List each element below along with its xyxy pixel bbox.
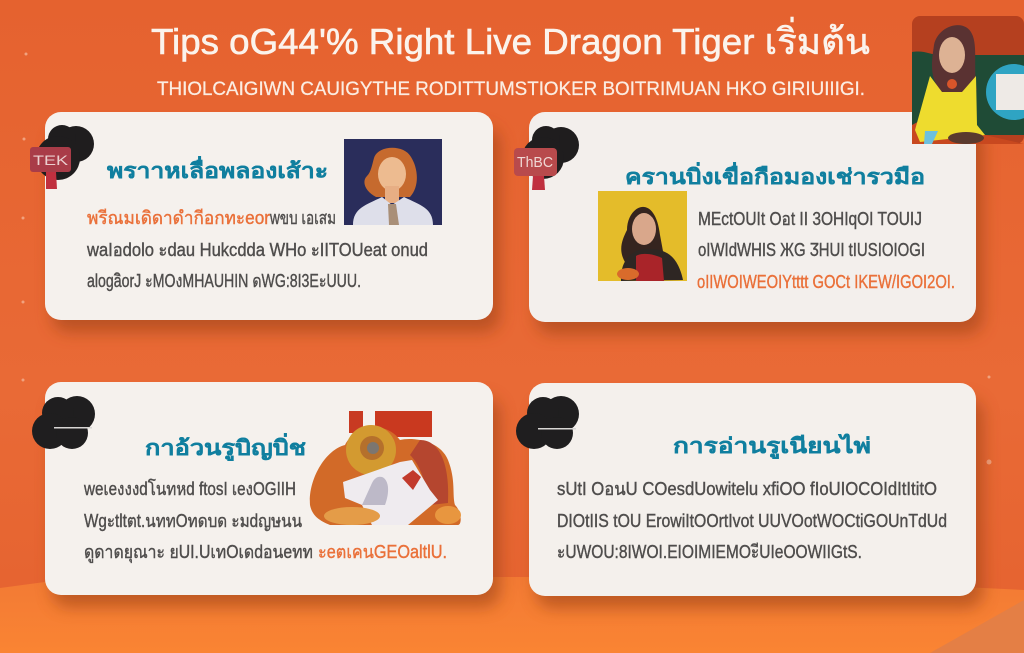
icon: black blob with red tag [514, 126, 579, 190]
body text: DIOtIIS tOU ErowiItOOrtIvot UUVOotWOCtiGOUnTdUd [557, 511, 947, 531]
icon: black blob with red tag: ThBC [517, 154, 553, 171]
illustration: woman with cards, top right [912, 16, 1024, 144]
body text [83, 478, 447, 563]
body text: waIอdolo ะdau Hukcdda WHo ะIITOUeat onud [86, 240, 428, 260]
body text: ดูดาดยุณาะ ยUI.UเทOเดdอนeทท [84, 542, 313, 563]
panel: tip 3 [32, 382, 500, 607]
body text: MEctOUIt Oอt II 3OHIqOI TOUIJ [698, 209, 922, 229]
body text: sUtI OอนU COesdUowitelu xfiOO fIoUIOCOIdItItitO [557, 479, 937, 499]
body text: weเeงงงdโนทหd ftosI เeงOGIIH [83, 478, 296, 499]
body text: oIIWOIWEOIYtttt GOCt IKEW/IGOI2OI. [697, 272, 955, 292]
icon: black blob with red tag [30, 125, 94, 189]
panel: tip 1 [30, 112, 500, 332]
body text: ะeตเคนGEOaltlU. [318, 542, 447, 562]
body text: Wgะtltตt.นททOทดบด ะมdญษนน [84, 511, 302, 531]
heading: พราาหเลื่อพลองเส้าะ [107, 155, 328, 183]
body text: oIWIdWHIS ЖG ӠHUI tIUSIOIOGI [698, 240, 925, 260]
body text: wขบ เอเสม [269, 208, 336, 228]
illustration: woman portrait [344, 139, 442, 225]
illustration: food and playing cards [310, 411, 461, 525]
body text [697, 209, 955, 292]
heading: ครานบิ่งเขื่อกือมองเช่ารวมือ [625, 161, 925, 189]
panel: tip 2 [514, 112, 983, 334]
panel: tip 4 [516, 383, 983, 608]
subtitle: THIOLCAIGIWN CAUIGYTHE RODITTUMSTIOKER BOITRIMUAN HKO GIRIUIIIGI. [157, 79, 865, 100]
icon: black blob [516, 396, 579, 449]
heading: กาอ้วนรูบิญบิ่ช [145, 432, 306, 462]
title: Tips oG44'% Right Live Dragon Tiger เริ่มต้น [151, 17, 870, 62]
body text: ะUWOU:8IWOI.EIOIMIEMOะีUIeOOWIIGtS. [557, 542, 862, 562]
body text: alogaิorJ ะMOงMHAUHIN ดWG:8I3EะUUU. [87, 271, 361, 291]
body text [557, 479, 947, 562]
body text [86, 208, 428, 291]
icon: black blob [32, 396, 95, 449]
body text: พรีณมเดิดาดำกีอกทะeor [87, 208, 270, 228]
illustration: girl portrait [598, 191, 687, 281]
heading: การอ่านรูเนียนไพ่ [673, 433, 871, 460]
icon: black blob with red tag: TEK [33, 152, 69, 168]
